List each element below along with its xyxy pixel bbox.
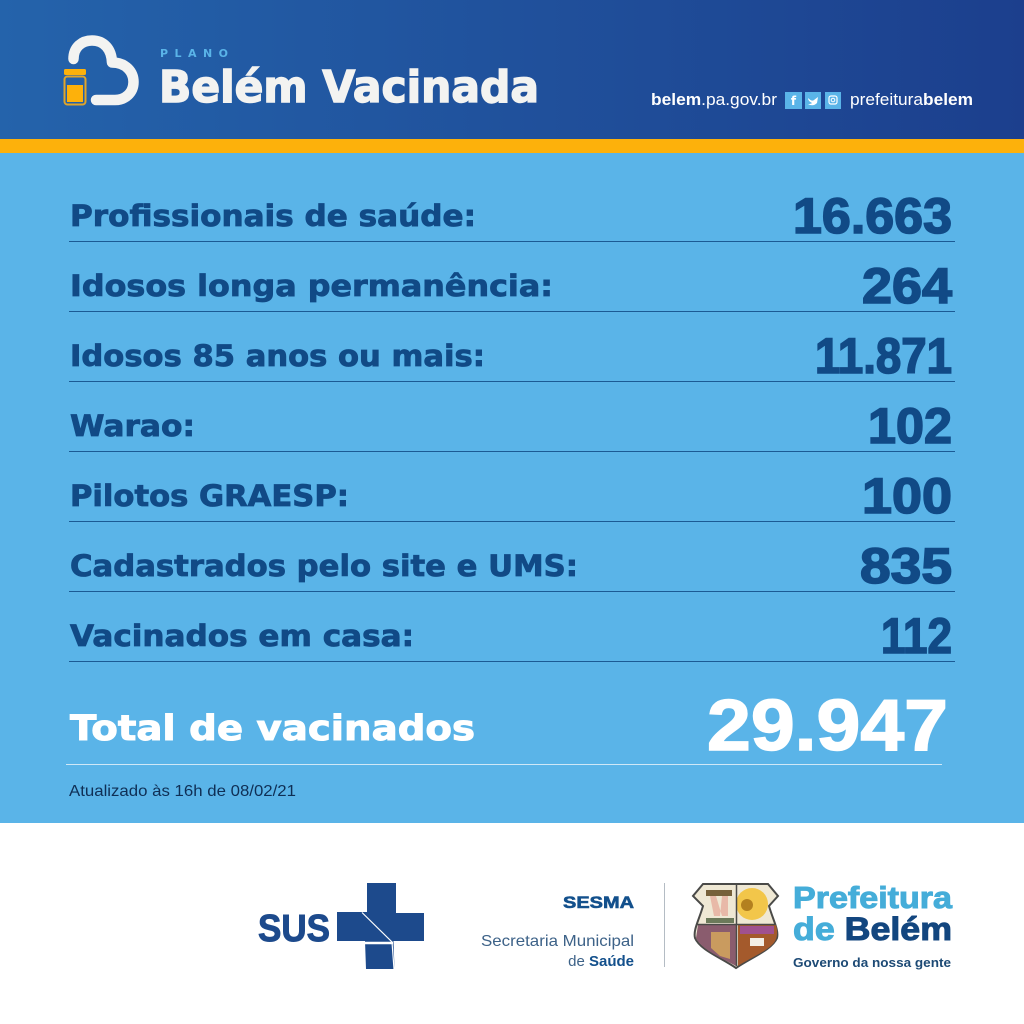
- row: Pilotos GRAESP: [69, 468, 955, 524]
- text: SESMA: SESMA: [563, 893, 634, 912]
- row: Vacinados em casa: 112: [881, 608, 952, 664]
- row: total: Total de vacinados: [70, 709, 475, 749]
- row: Warao: Warao:: [70, 409, 195, 443]
- row: Pilotos GRAESP: Pilotos GRAESP:: [70, 479, 349, 513]
- row: total: 29.947: [707, 686, 948, 766]
- text: social handle: prefeiturabelem: [850, 91, 973, 109]
- row: Profissionais de saúde: [69, 188, 955, 244]
- row: Vacinados em casa: Vacinados em casa:: [70, 619, 414, 653]
- logo text: Prefeitura de Belém: Governo da nossa gente: [793, 955, 951, 970]
- row: Profissionais de saúde: Profissionais de saúde:: [70, 199, 476, 233]
- logo text: Prefeitura de Belém: Prefeitura: [793, 880, 953, 915]
- icon: social media squares: [785, 92, 841, 109]
- logo text: Prefeitura de Belém: [793, 880, 953, 970]
- text: Secretaria Municipal de Saúde: Secretaria Municipal: [481, 933, 634, 950]
- text: update note: Atualizado às 16h de 08/02/21: [69, 783, 296, 800]
- panel: main background: [0, 153, 1024, 823]
- row: Idosos longa permanência: [69, 258, 955, 314]
- row: Pilotos GRAESP: 100: [862, 468, 952, 524]
- icon: social media squares: f: [791, 94, 797, 108]
- row: Idosos 85 anos ou mais: [69, 328, 955, 384]
- text: website: belem.pa.gov.br: [651, 91, 778, 109]
- row: Cadastrados pelo site e UMS: 835: [860, 538, 952, 594]
- icon: coat of arms of Belém: [693, 884, 778, 968]
- row: Idosos 85 anos ou mais: 11.871: [815, 328, 952, 384]
- logo text: Prefeitura de Belém: de Belém: [793, 911, 952, 947]
- row: Idosos longa permanência: 264: [862, 258, 952, 314]
- row: Cadastrados pelo site e UMS: [69, 538, 955, 594]
- logo: SUS: [258, 883, 424, 969]
- row: Idosos longa permanência: Idosos longa permanência:: [70, 269, 553, 303]
- panel: header: [0, 0, 1024, 153]
- row: Warao: [69, 398, 955, 454]
- text: Secretaria Municipal de Saúde: [481, 933, 634, 970]
- title: Belém Vacinada: Belém Vacinada: [159, 62, 539, 113]
- icon: cloud with vaccine vial: [64, 40, 134, 104]
- row: Vacinados em casa: [69, 608, 955, 664]
- panel: footer: [0, 823, 1024, 1024]
- row: Idosos 85 anos ou mais: Idosos 85 anos ou mais:: [70, 339, 485, 373]
- row: total: [66, 686, 948, 766]
- row: Profissionais de saúde: 16.663: [793, 188, 952, 244]
- text: Secretaria Municipal de Saúde: de Saúde: [568, 953, 634, 970]
- row: Cadastrados pelo site e UMS: Cadastrados pelo site e UMS:: [70, 549, 578, 583]
- logo: SUS: SUS: [258, 908, 330, 950]
- row: Warao: 102: [868, 398, 952, 454]
- text: plano: PLANO: [160, 47, 228, 60]
